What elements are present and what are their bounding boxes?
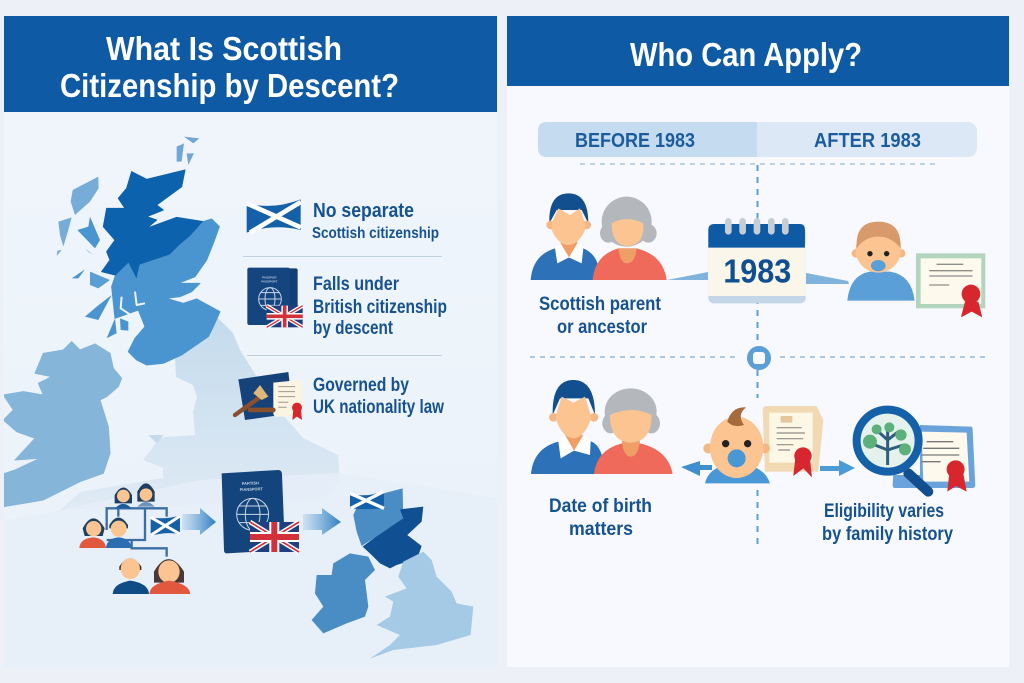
text: UK nationality law <box>313 375 444 418</box>
text: eligibility varies <box>822 501 953 545</box>
timeline tabs: BEFORE 1983 <box>575 130 695 152</box>
heading bar: left: Citizenship by Descent? <box>60 67 399 104</box>
text: eligibility varies: Eligibility varies <box>824 501 944 522</box>
divider node <box>747 346 771 370</box>
icon: passports with UK flag: PASSPORT <box>261 279 278 283</box>
icon: baby with certificate <box>847 222 985 317</box>
map: large British Isles <box>4 136 340 510</box>
heading bar: right: Who Can Apply? <box>630 36 862 73</box>
icon: large passport with UK flag: PIANSPORT <box>240 486 264 492</box>
heading bar: right <box>507 16 1009 86</box>
text: no separate <box>312 200 439 242</box>
arrow: tree to passport <box>182 508 216 535</box>
map: small British Isles <box>312 488 473 659</box>
text: British citizenship: Falls under <box>313 274 400 295</box>
arrow: double pointing outward <box>681 460 855 476</box>
arrow: left wedge <box>667 272 708 280</box>
arrow: right wedge <box>806 273 849 284</box>
panel: what is Scottish citizenship <box>0 16 497 668</box>
text: no separate: Scottish citizenship <box>312 225 439 242</box>
icon: large passport with UK flag <box>222 470 299 553</box>
icon: family tree <box>79 483 190 594</box>
text: Scottish parent <box>539 294 662 338</box>
icon: gavel and document <box>235 372 303 420</box>
icon: calendar 1983 <box>708 218 806 303</box>
text: date of birth: Date of birth <box>549 496 652 517</box>
text: no separate: No separate <box>313 200 414 222</box>
text: British citizenship <box>313 274 447 339</box>
icon: magnifier with family tree and certificate <box>857 410 975 492</box>
text: British citizenship: British citizenship <box>313 297 447 318</box>
icon: parent and ancestor bottom <box>531 380 673 474</box>
timeline tabs <box>538 122 977 157</box>
heading bar: left <box>4 16 497 112</box>
text: Scottish parent: Scottish parent <box>539 294 662 315</box>
icon: passports with UK flag <box>247 268 303 327</box>
panel: who can apply <box>507 16 1009 667</box>
icon: parent and ancestor top <box>531 193 667 280</box>
timeline tabs: AFTER 1983 <box>814 130 921 152</box>
icon: Scottish flag small <box>151 515 180 536</box>
heading bar: left: What Is Scottish <box>106 30 342 67</box>
text: eligibility varies: by family history <box>822 524 953 545</box>
arrow: passport to map <box>303 508 341 535</box>
icon: calendar 1983: 1983 <box>723 254 791 291</box>
text: date of birth: matters <box>569 519 633 540</box>
icon: large passport with UK flag: PARTISH <box>242 480 259 486</box>
text: UK nationality law: UK nationality law <box>313 397 444 418</box>
text: Scottish parent: or ancestor <box>557 317 648 338</box>
icon: passports with UK flag: PASSPOR <box>262 275 277 279</box>
text: UK nationality law: Governed by <box>313 375 409 396</box>
text: British citizenship: by descent <box>313 318 394 339</box>
icon: baby with document <box>703 406 823 483</box>
icon: Scottish flag <box>247 199 301 233</box>
text: date of birth <box>549 496 652 540</box>
